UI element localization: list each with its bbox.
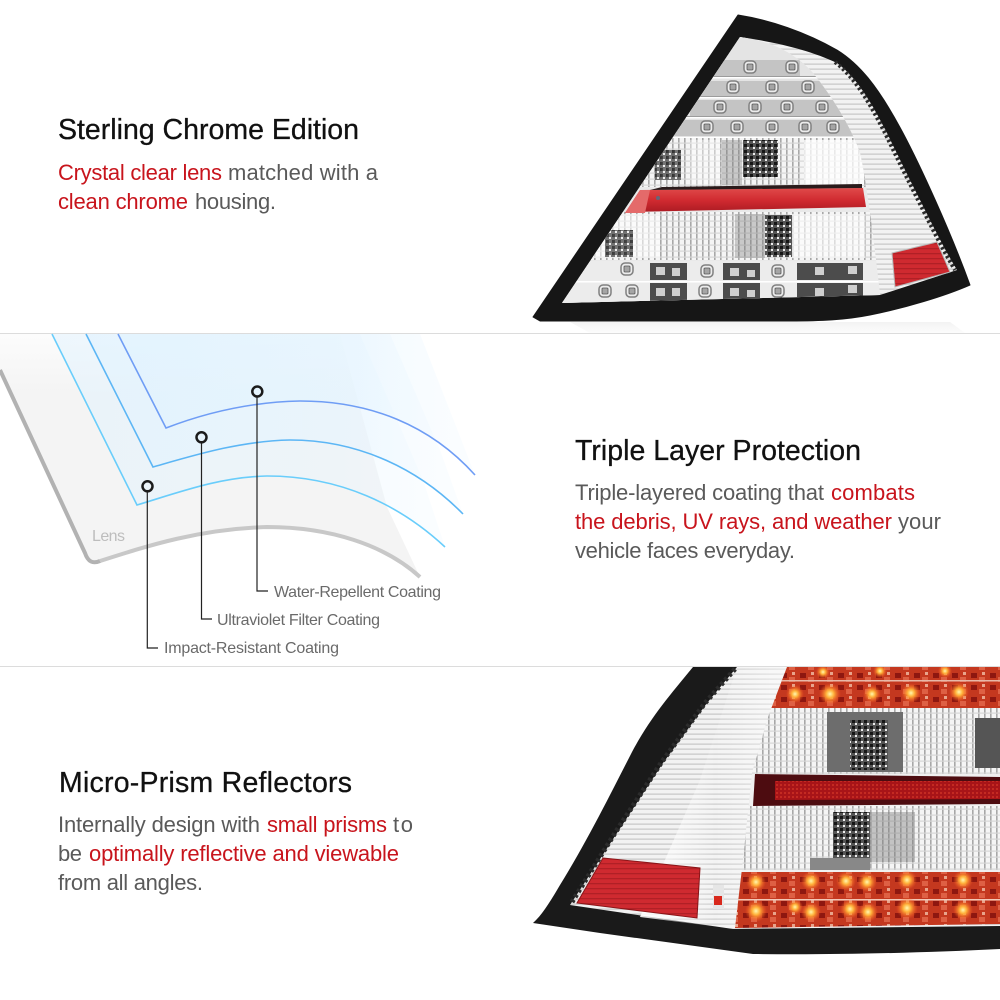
callout: ultraviolet filter coating: Ultraviolet Filter Coating — [217, 612, 380, 629]
panel: Micro-Prism Reflectors text — [58, 767, 413, 895]
text block: crystal clear lens description: clean chrome — [58, 189, 188, 214]
callout: impact-resistant coating — [142, 481, 339, 657]
text block: micro-prism description: small prisms — [267, 812, 387, 837]
panel: triple layer coating diagram — [0, 334, 475, 657]
reflection beneath light — [570, 322, 965, 333]
text block: crystal clear lens description: Crystal clear lens — [58, 160, 222, 185]
text block: crystal clear lens description: matched with a — [228, 160, 379, 185]
text block: micro-prism description: be — [58, 841, 82, 866]
text block: triple layer description: combats — [831, 480, 915, 505]
amber side marker — [577, 858, 700, 918]
red center reflector bar — [625, 184, 866, 213]
clear prism sections — [640, 138, 866, 187]
lens — [555, 35, 885, 305]
chrome body — [562, 37, 957, 303]
text block: crystal clear lens description — [58, 160, 379, 214]
coating sheet: water-repellent — [118, 334, 475, 475]
text block: micro-prism description: Internally design with — [58, 812, 260, 837]
heading: Sterling Chrome Edition: Sterling Chrome Edition — [58, 114, 359, 146]
clear prism lower — [740, 806, 1000, 870]
text block: triple layer description: Triple-layered coating that — [575, 480, 824, 505]
text block: crystal clear lens description: housing. — [195, 189, 276, 214]
divider: top and middle rules — [0, 333, 1000, 667]
amber side marker — [892, 242, 950, 287]
coating sheet: ultraviolet filter — [86, 334, 463, 514]
panel: Sterling Chrome Edition text — [58, 114, 379, 214]
dark prism clusters — [743, 140, 778, 177]
dark red reflector bar — [753, 774, 1000, 806]
text block: micro-prism description — [58, 812, 413, 895]
clear prism upper — [750, 708, 1000, 774]
serrated chrome edge — [835, 62, 955, 270]
heading: Triple Layer Protection: Triple Layer Protection — [575, 435, 861, 467]
image: illuminated tail light close-up — [533, 664, 1000, 954]
label: Lens: Lens — [92, 528, 125, 545]
text block: micro-prism description: from all angles. — [58, 870, 203, 895]
text block: triple layer description — [575, 480, 941, 563]
callout: water-repellent coating: Water-Repellent Coating — [274, 584, 441, 601]
lens layer — [0, 334, 420, 577]
chrome ribbed body — [570, 667, 1000, 929]
text block: triple layer description: vehicle faces everyday. — [575, 538, 795, 563]
image: chrome tail light full view — [533, 15, 970, 333]
upper LED row — [770, 667, 1000, 708]
LED rows upper — [672, 37, 748, 138]
callout: water-repellent coating — [252, 386, 441, 601]
text block: triple layer description: your — [898, 509, 941, 534]
serrated chrome edge — [572, 669, 735, 902]
text block: triple layer description: the debris, UV rays, and weather — [575, 509, 892, 534]
small LED — [713, 885, 724, 909]
black housing — [533, 667, 1000, 954]
LED rows lower — [555, 261, 885, 303]
black housing — [533, 15, 970, 321]
panel: Triple Layer Protection text — [575, 435, 941, 563]
text block: micro-prism description: to — [393, 812, 413, 837]
text block: micro-prism description: optimally reflective and viewable — [89, 841, 399, 866]
coating sheet: impact-resistant — [52, 334, 445, 547]
callout: impact-resistant coating: Impact-Resistant Coating — [164, 640, 339, 657]
lens — [730, 664, 1000, 932]
lower LED rows — [735, 872, 1000, 928]
heading: Micro-Prism Reflectors: Micro-Prism Reflectors — [59, 767, 352, 799]
callout: ultraviolet filter coating — [196, 432, 380, 629]
